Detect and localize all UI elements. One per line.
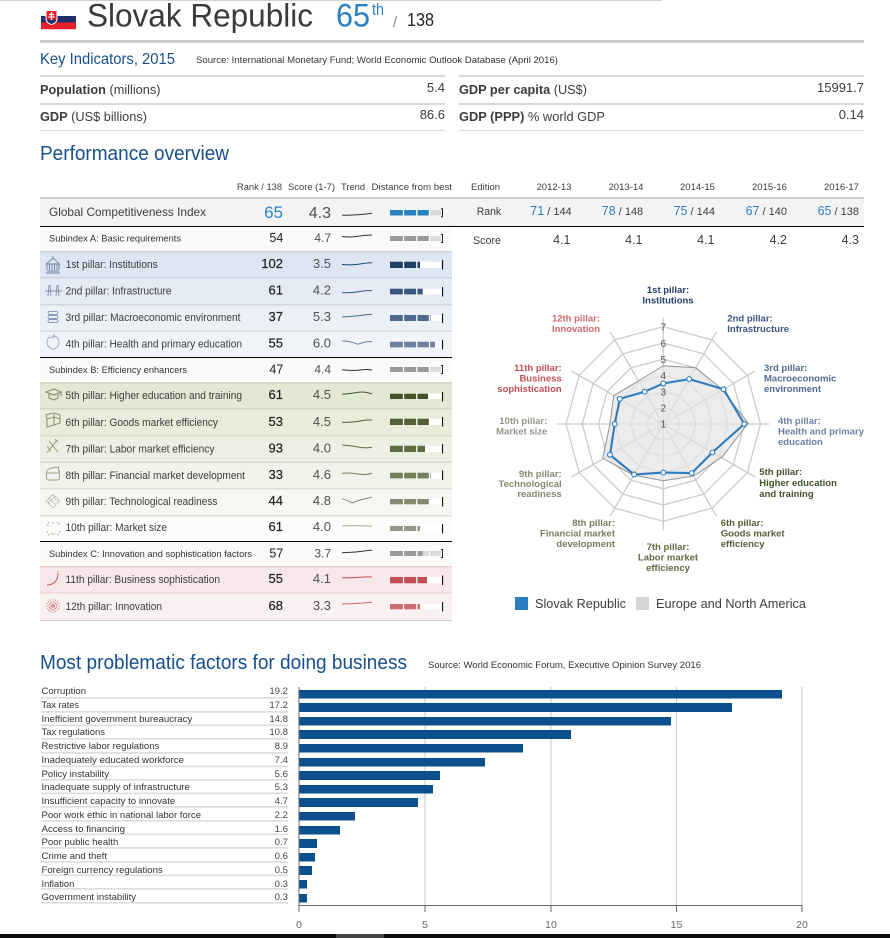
panel: edition history: Rank [477,206,502,218]
table column headers [237,182,859,193]
radar scale labels: 7 [661,322,667,334]
row: 12th pillar: 12th pillar: Innovation [66,601,162,613]
row: Subindex C: Subindex C: Innovation and sophistication factors [49,549,252,560]
chart axis labels: 0 [296,919,302,931]
radar scale labels: 2 [661,404,667,414]
row: 11th pillar [40,568,452,592]
row: Subindex A: 4.7 [314,231,331,245]
row: 4th pillar: 4th pillar: Health and primary education [66,338,242,350]
row: 2nd pillar [40,278,452,304]
row: 6th pillar: 6th pillar: Goods market efficiency [66,417,218,429]
factor list: Tax regulations [42,727,105,738]
icon: Slovak flag [41,10,76,29]
icon: institutions [46,256,60,273]
row: Subindex A [40,227,452,251]
icon: technology [46,494,60,508]
row: Subindex C: 3.7 [314,546,331,560]
row: 1st pillar: 1st pillar: Institutions [66,259,158,271]
row: 8th pillar: 8th pillar: Financial market development [66,470,245,482]
radar axis labels: Innovation [552,324,600,335]
row: 11th pillar: 4.1 [313,571,331,586]
radar axis labels: 9th pillar: [519,469,562,480]
row: Global Competitiveness Index: 65 [264,203,283,222]
row: 5th pillar: 5th pillar: Higher education and training [66,390,242,402]
radar scale labels [661,322,667,430]
row: 1st pillar [40,252,452,277]
table column headers: Rank / 138 [237,182,282,193]
factor list: 14.8 [269,714,288,725]
factor list: Policy instability [42,769,109,780]
row: 2nd pillar: 2nd pillar: Infrastructure [66,286,172,298]
factor list: Corruption [42,686,86,697]
title: country name and rank: 138 [407,10,434,30]
factor list: Poor work ethic in national labor force [42,810,201,821]
radar axis labels: 5th pillar: [759,467,802,478]
row: 1st pillar: 102 [261,256,283,271]
radar axis labels: 7th pillar: [647,542,689,553]
panel: edition history: 4.1 [697,233,715,247]
radar axis labels: environment [764,384,822,395]
row: 10th pillar: 10th pillar: Market size [66,522,167,534]
icon: business curve [47,571,58,585]
table column headers: Distance from best [372,182,452,193]
factor list: 8.9 [275,741,288,752]
table column headers: 2015-16 [752,182,787,193]
radar axis labels: 3rd pillar: [764,363,807,374]
chart axis labels: 10 [545,919,557,931]
panel: edition history: 78 / 148 [602,204,643,218]
panel: edition history: 75 / 144 [674,204,715,218]
factor list: Foreign currency regulations [42,865,163,876]
row: 3rd pillar: 3rd pillar: Macroeconomic environment [66,312,240,324]
panel: key indicators table: GDP per capita (US$) [459,82,587,97]
row: 6th pillar: 4.5 [313,414,331,429]
row: 8th pillar: 33 [269,467,283,482]
radar legend: Europe and North America [656,596,807,611]
factor list [41,686,289,904]
icon: labor tools [47,439,58,453]
radar axis labels: Market size [496,426,547,438]
row: 12th pillar: 3.3 [313,598,331,613]
radar scale labels: 5 [661,355,667,366]
factor list: Government instability [42,892,136,903]
row: 11th pillar: 11th pillar: Business sophistication [66,574,220,586]
radar axis labels: Higher education [759,478,837,489]
table column headers: 2012-13 [536,182,572,193]
radar axis labels: Labor market [638,552,699,564]
row: 8th pillar [40,463,452,488]
radar legend [515,596,807,611]
panel: edition history: 71 / 144 [530,204,572,218]
chart axis labels: 15 [671,919,682,931]
row: 6th pillar [40,410,452,435]
row: 5th pillar: 4.5 [313,387,331,402]
factor list: 19.2 [269,686,288,697]
factor list: 5.6 [275,769,288,780]
heading: key indicators: Key Indicators, 2015 [40,51,175,68]
factor list: Inadequately educated workforce [42,755,184,766]
row: Global Competitiveness Index [40,197,864,226]
icon: graduation cap [46,389,61,400]
icon: macroeconomic [48,312,58,322]
radar axis labels: 10th pillar: [499,416,547,427]
panel: edition history: 4.2 [770,233,787,247]
chart axis labels [296,919,808,931]
radar axis labels: Goods market [721,528,785,540]
radar axis labels: and training [759,489,814,500]
row: 4th pillar: 55 [269,336,283,351]
heading: performance overview: Performance overview [40,143,230,165]
row: Subindex A: 54 [269,231,283,245]
source note: problematic factors: Source: World Economic Forum, Executive Opinion Survey 2016 [428,660,701,671]
row: Subindex B: 47 [269,362,283,376]
row: 12th pillar [40,594,452,620]
title: country name and rank: / [393,14,398,31]
panel: edition history [473,204,859,247]
factor list: Insufficient capacity to innovate [42,796,175,807]
radar axis labels: Health and primary [778,426,865,438]
heading: most problematic factors: Most problematic factors for doing business [40,652,407,674]
row: Subindex C: 57 [269,546,283,560]
radar axis labels: Technological [499,479,562,490]
factor list: Crime and theft [42,851,107,862]
radar axis labels: 1st pillar: [647,285,689,296]
chart axis labels: 5 [422,919,428,931]
panel: key indicators table: 0.14 [839,107,864,122]
row: Global Competitiveness Index: Global Competitiveness Index [49,205,206,219]
radar axis labels: Macroeconomic [764,374,836,384]
panel: edition history: 4.3 [842,233,859,247]
factor list: Restrictive labor regulations [42,741,160,752]
source note: key indicators: Source: International Monetary Fund; World Economic Outlook Database (April 2016) [196,55,558,66]
factor list: Tax rates [42,700,79,711]
title: country name and rank: th [372,0,384,19]
radar axis labels: readiness [517,489,562,500]
panel: key indicators table: 15991.7 [817,80,864,95]
row: 9th pillar [40,490,452,515]
row: 3rd pillar: 5.3 [313,309,331,324]
radar legend: Slovak Republic [535,596,626,611]
table column headers: Score (1-7) [288,182,335,193]
row: Subindex B: 4.4 [314,362,331,376]
row: 4th pillar [40,332,452,357]
radar scale labels: 1 [661,420,667,430]
row: 2nd pillar: 61 [269,282,283,298]
icon: infrastructure [45,285,62,296]
row: Subindex C [40,542,452,566]
radar axis labels: education [778,437,823,448]
radar axis labels: efficiency [646,563,691,574]
table column headers: 2013-14 [608,182,644,193]
radar axis labels [496,285,865,574]
panel: key indicators table: 5.4 [427,80,445,95]
row: 12th pillar: 68 [269,598,283,613]
factor list: 0.7 [275,837,288,848]
factor list: 2.2 [275,810,288,821]
factor list: 0.6 [275,851,288,862]
panel: key indicators table: 86.6 [420,107,445,122]
panel: key indicators table: Population (millions) [40,82,160,97]
row: 9th pillar: 9th pillar: Technological readiness [66,496,218,508]
factor list: 1.6 [275,824,288,835]
factor list: Inflation [42,879,74,890]
icon: health apple [47,334,59,349]
radar axis labels: Financial market [540,528,616,540]
factor list: 7.4 [275,755,289,766]
row: 3rd pillar: 37 [269,309,283,324]
panel: key indicators table [40,75,864,131]
row: 5th pillar: 61 [269,387,283,402]
row: 11th pillar: 55 [269,571,283,586]
radar axis labels: 2nd pillar: [727,314,773,324]
icon: financial wallet [46,467,60,480]
row: 10th pillar [40,516,452,541]
factor list: 0.3 [275,879,288,890]
row: Subindex A: Subindex A: Basic requirements [49,234,181,244]
radar chart [557,318,769,530]
row: 10th pillar: 4.0 [313,519,331,534]
factor list: 10.8 [269,727,288,738]
row: 7th pillar: 7th pillar: Labor market efficiency [66,444,215,456]
radar scale labels: 4 [661,371,667,382]
row: 1st pillar: 3.5 [313,256,331,271]
factor list: Poor public health [42,837,118,848]
table column headers: Trend [341,182,365,193]
row: Subindex B: Subindex B: Efficiency enhancers [49,365,187,376]
row: 2nd pillar: 4.2 [313,282,331,298]
row: 7th pillar [40,436,452,462]
row: 8th pillar: 4.6 [313,467,331,482]
row: Global Competitiveness Index: 4.3 [309,205,331,222]
row: 4th pillar: 6.0 [313,336,331,351]
row: 10th pillar: 61 [269,519,283,534]
row: 5th pillar [40,384,452,408]
radar axis labels: 11th pillar: [514,363,562,374]
panel: edition history: Score [473,235,501,247]
table column headers: 2014-15 [680,182,715,193]
icon: market size arrows [47,522,60,536]
panel: key indicators table: GDP (PPP) % world GDP [459,109,605,124]
radar scale labels: 3 [661,388,667,398]
row: 3rd pillar [40,306,452,330]
factor list: 0.5 [275,865,288,876]
row: Subindex B [40,358,452,382]
icon: goods boxes [46,413,60,427]
row: 6th pillar: 53 [269,414,283,429]
radar series: Europe and North America [603,366,748,481]
row: 9th pillar: 44 [269,493,283,508]
factor list: 5.3 [275,782,288,793]
panel: edition history: 4.1 [625,233,643,247]
chart axis labels: 20 [796,919,808,931]
table column headers: 2016-17 [824,182,859,193]
row: 9th pillar: 4.8 [313,493,331,508]
radar axis labels: development [556,539,616,550]
radar axis labels: sophistication [497,384,562,395]
factor list: 17.2 [269,700,288,711]
panel: edition history: 4.1 [553,233,571,247]
radar axis labels: efficiency [721,539,765,550]
radar axis labels: Infrastructure [727,324,789,335]
radar axis labels: 6th pillar: [721,518,763,529]
radar axis labels: Institutions [642,296,694,306]
radar axis labels: 8th pillar: [572,518,615,529]
bar chart: problematic factors [296,687,808,931]
row: 7th pillar: 4.0 [313,440,331,456]
icon: innovation burst [46,599,60,613]
panel: edition history: 67 / 140 [746,204,787,218]
factor list: Inadequate supply of infrastructure [42,782,190,793]
panel: key indicators table: GDP (US$ billions) [40,109,147,124]
radar axis labels: Business [519,374,562,384]
radar scale labels: 6 [661,339,667,350]
radar axis labels: 12th pillar: [552,314,600,324]
radar axis labels: 4th pillar: [778,416,821,427]
factor list: 0.3 [275,892,288,903]
row: 7th pillar: 93 [269,440,283,456]
factor list: 4.7 [275,796,288,807]
table column headers: Edition [471,182,500,193]
title: country name and rank [87,0,434,34]
radar series: Slovak Republic [608,377,747,477]
factor list: Inefficient government bureaucracy [42,714,193,725]
panel: edition history: 65 / 138 [818,204,859,218]
factor list: Access to financing [42,824,125,835]
